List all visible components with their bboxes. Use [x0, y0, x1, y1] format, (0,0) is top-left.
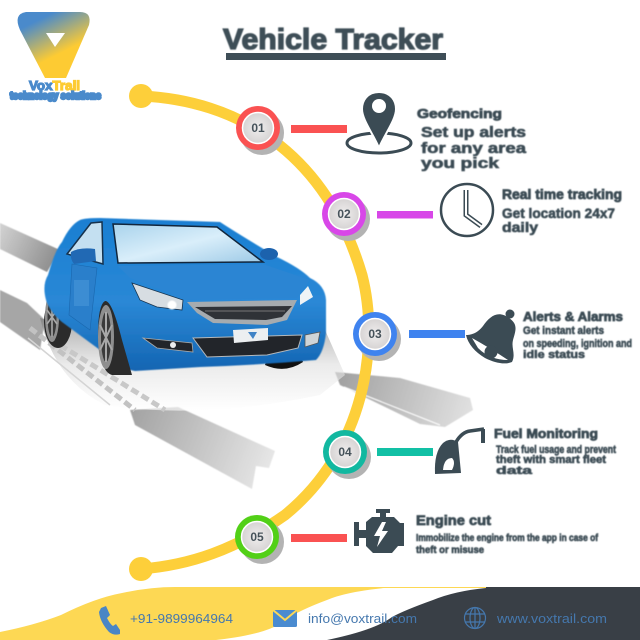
text: step 4: theft with smart fleet	[496, 454, 606, 466]
logo	[10, 12, 101, 102]
step 04 marker: 04	[338, 445, 352, 459]
logo wordmark: VoxTrail	[29, 78, 80, 93]
logo tagline: technology solutions	[10, 91, 101, 102]
icon: bell	[466, 310, 516, 363]
footer band	[0, 587, 640, 640]
timeline curve	[129, 84, 369, 581]
connector 04	[377, 448, 433, 456]
right headlight	[300, 286, 313, 305]
car body	[44, 218, 326, 371]
website: www.voxtrail.com	[496, 611, 607, 626]
text: step 3	[523, 309, 632, 361]
text: step 1	[417, 106, 527, 172]
title: Vehicle Tracker	[223, 24, 443, 56]
left headlight	[132, 283, 183, 310]
icon: engine	[354, 509, 404, 553]
text: step 4	[494, 426, 616, 477]
number plate	[233, 328, 268, 343]
text: step 5: Immobilize the engine from the app in case of	[416, 533, 599, 544]
text: step 2: daily	[502, 219, 538, 235]
side window	[67, 222, 103, 264]
text: step 2: Real time tracking	[502, 186, 622, 202]
upper grille	[187, 300, 297, 325]
text: step 4: Fuel Monitoring	[494, 426, 598, 441]
email: info@voxtrail.com	[308, 611, 417, 626]
car ground shadow	[28, 318, 345, 411]
step 04 marker	[323, 430, 371, 479]
text: step 5: Engine cut	[416, 512, 491, 528]
step 01 marker	[236, 106, 284, 155]
text: step 2	[502, 186, 622, 235]
connector 02	[377, 211, 433, 218]
connector 01	[291, 125, 347, 133]
car	[44, 218, 326, 375]
icon: clock	[441, 184, 493, 236]
text: step 3: Get instant alerts	[523, 325, 604, 337]
left fog lamp	[143, 338, 193, 352]
lower grille	[193, 335, 302, 357]
icon: fuel nozzle	[435, 429, 485, 474]
side mirror	[71, 248, 96, 264]
step 03 marker	[353, 312, 401, 361]
icon: location pin	[347, 92, 411, 153]
connector 05	[291, 534, 347, 542]
icon: envelope	[273, 610, 297, 627]
step 02 marker	[322, 192, 370, 241]
text: step 1: you pick	[421, 155, 500, 172]
step 05 marker	[235, 515, 284, 564]
rear wheel	[44, 292, 72, 348]
text: step 1: Geofencing	[417, 106, 502, 121]
door panel	[69, 264, 97, 330]
step 02 marker: 02	[337, 207, 351, 221]
tyre tracks	[0, 223, 473, 489]
hood	[118, 264, 310, 300]
text: step 2: Get location 24x7	[502, 205, 615, 221]
right fog lamp	[305, 332, 320, 347]
windshield	[113, 224, 263, 263]
text: step 4: data	[496, 465, 533, 477]
icon: globe	[464, 607, 486, 629]
text: step 1: for any area	[421, 140, 527, 157]
step 05 marker: 05	[250, 530, 264, 544]
connector 03	[409, 330, 465, 338]
phone number: +91-9899964964	[130, 611, 233, 626]
text: step 1: Set up alerts	[421, 124, 526, 141]
text: step 3: Alerts & Alarms	[523, 309, 623, 324]
text: step 5	[416, 512, 599, 556]
right mirror	[260, 248, 278, 260]
icon: phone	[99, 606, 120, 635]
step 01 marker: 01	[251, 121, 265, 135]
step 03 marker: 03	[368, 327, 382, 341]
front wheel	[98, 301, 132, 375]
text: step 5: theft or misuse	[416, 545, 484, 556]
text: step 3: idle status	[523, 349, 585, 361]
